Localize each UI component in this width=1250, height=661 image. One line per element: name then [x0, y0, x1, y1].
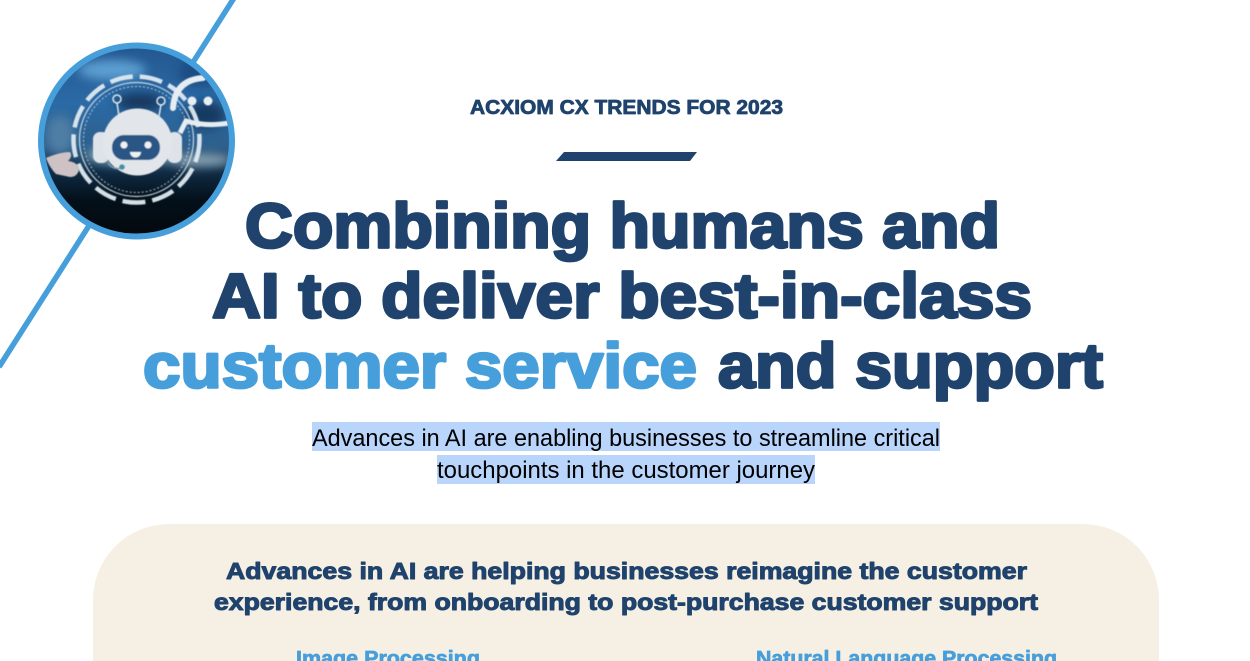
icon: chatbot photo circle	[38, 42, 235, 240]
title: Combining humans and	[245, 192, 1000, 262]
title	[143, 192, 1103, 402]
subtitle with highlight: Advances in AI are enabling businesses to streamline critical	[312, 425, 940, 452]
title: and support	[718, 332, 1103, 402]
subtitle with highlight: touchpoints in the customer journey	[437, 457, 815, 484]
chat bubble	[173, 78, 230, 133]
panel: AI capabilities	[93, 524, 1159, 661]
panel heading: experience, from onboarding to post-purchase customer support	[214, 589, 1038, 615]
eyebrow heading: ACXIOM CX TRENDS FOR 2023	[470, 97, 783, 119]
panel heading	[214, 558, 1038, 615]
robot head	[93, 95, 182, 176]
accent bar	[556, 152, 697, 161]
hand	[46, 152, 79, 177]
title: customer service	[143, 332, 697, 402]
diagonal accent line	[0, 0, 234, 367]
chatbot ring	[74, 76, 200, 202]
subtitle with highlight	[312, 422, 940, 484]
panel heading: Advances in AI are helping businesses reimagine the customer	[226, 558, 1027, 584]
title: AI to deliver best-in-class	[212, 262, 1032, 332]
